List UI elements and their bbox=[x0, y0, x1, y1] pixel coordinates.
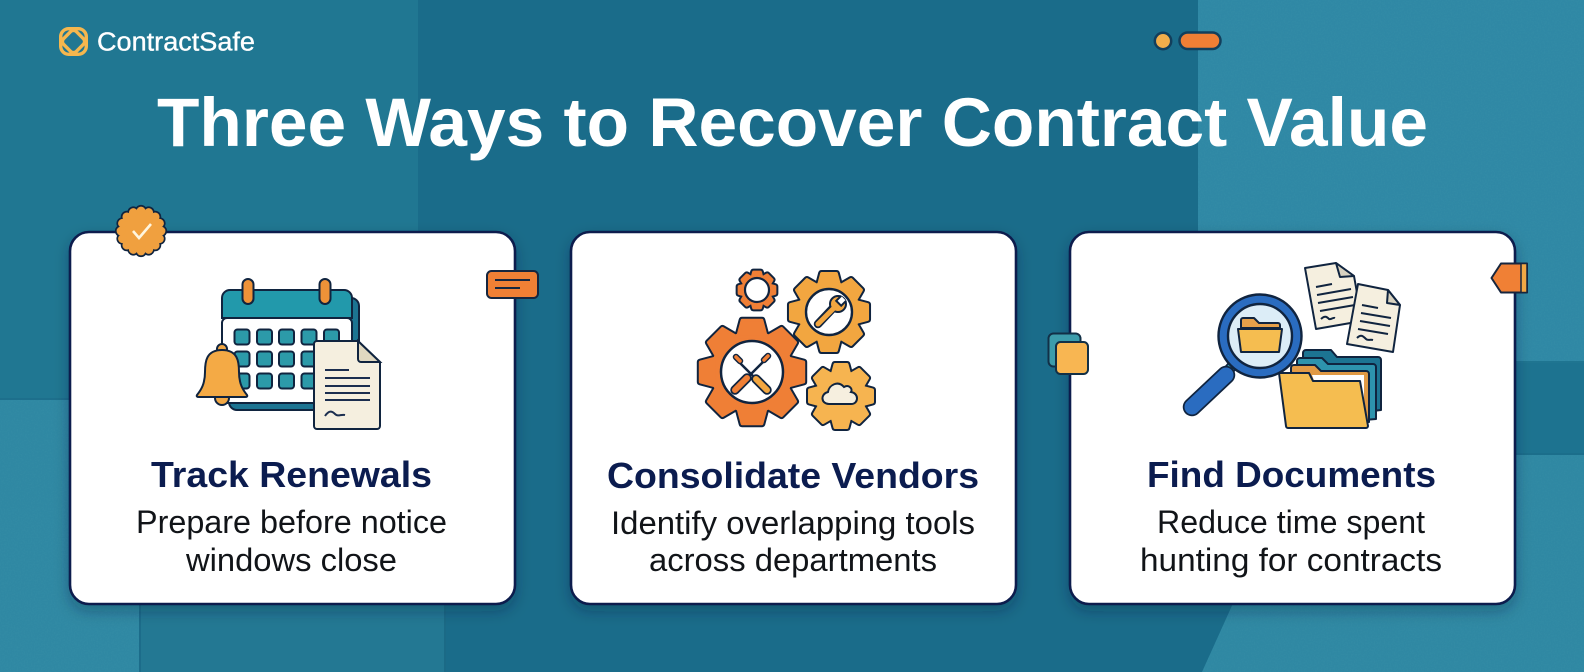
folders bbox=[1279, 350, 1381, 428]
decorative dot and pill bbox=[1155, 32, 1220, 49]
description: Reduce time spent bbox=[1157, 504, 1425, 540]
description bbox=[136, 504, 447, 578]
title: Three Ways to Recover Contract Value bbox=[157, 84, 1428, 161]
icon: stacked squares bbox=[1048, 334, 1088, 374]
panel: find documents bbox=[1048, 232, 1527, 604]
logo: ContractSafe bbox=[61, 28, 255, 56]
panel: consolidate vendors bbox=[571, 232, 1016, 604]
icon: calendar, bell and document bbox=[197, 279, 380, 429]
icon: gears bbox=[700, 272, 872, 427]
heading: Find Documents bbox=[1147, 454, 1436, 495]
description bbox=[611, 505, 975, 578]
icon: orange tag bbox=[487, 271, 538, 298]
card background bbox=[571, 232, 1016, 604]
description: across departments bbox=[649, 542, 937, 578]
documents bbox=[1305, 263, 1400, 352]
icon: magnifier, documents and folders bbox=[1192, 263, 1400, 428]
description bbox=[1140, 504, 1442, 578]
icon: logo mark bbox=[61, 29, 86, 54]
magnifier bbox=[1192, 294, 1302, 407]
description: Prepare before notice bbox=[136, 504, 447, 540]
logo wordmark: ContractSafe bbox=[97, 28, 255, 56]
description: Identify overlapping tools bbox=[611, 505, 975, 541]
icon: check badge bbox=[117, 207, 165, 255]
description: windows close bbox=[185, 542, 397, 578]
description: hunting for contracts bbox=[1140, 542, 1442, 578]
large gear with crossed tools bbox=[700, 320, 804, 424]
heading: Track Renewals bbox=[151, 454, 432, 495]
cloud gear bbox=[810, 365, 872, 427]
icon: arrow tag bbox=[1492, 264, 1527, 292]
card background bbox=[70, 232, 515, 604]
panel: track renewals bbox=[70, 207, 538, 604]
small gear bbox=[739, 272, 775, 308]
wrench gear bbox=[790, 273, 868, 351]
card background bbox=[1070, 232, 1515, 604]
heading: Consolidate Vendors bbox=[607, 455, 979, 496]
